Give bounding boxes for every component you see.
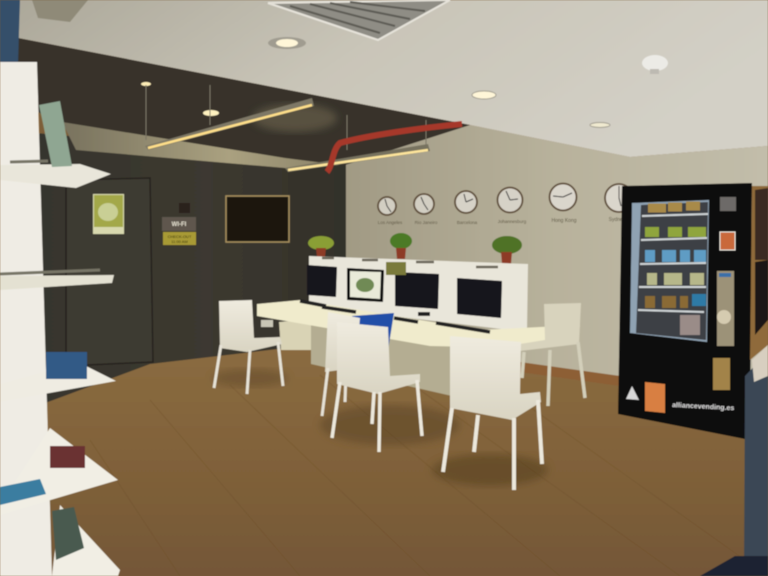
potted plants — [308, 233, 522, 264]
blue jacket on chair — [352, 313, 394, 382]
white chair back right — [520, 303, 585, 406]
wall clocks: Barcelona — [457, 220, 478, 225]
logo — [626, 386, 639, 400]
baseboard — [520, 362, 620, 386]
brand text: alliancevending.es — [672, 402, 735, 412]
wall TV — [226, 196, 289, 242]
white computer desk — [257, 256, 580, 396]
door — [66, 178, 153, 366]
wall outlet — [261, 320, 273, 327]
vending machine — [618, 183, 752, 440]
wall clocks: Hong Kong — [551, 218, 577, 224]
white chair front — [443, 336, 542, 490]
back wall — [345, 125, 768, 383]
white chair centre rear — [322, 312, 360, 416]
adjacent machine and person — [700, 186, 768, 576]
white ottoman — [279, 319, 312, 350]
wall clocks: Rio Janeiro — [415, 220, 438, 225]
white chair centre — [332, 322, 422, 452]
green poster — [93, 194, 124, 234]
ceiling bulkhead — [18, 38, 470, 168]
pendant light bars — [145, 85, 430, 172]
shelves — [0, 164, 111, 188]
wall clocks: Johannesburg — [498, 219, 527, 224]
control panel — [713, 197, 736, 390]
blue column corner — [0, 0, 20, 64]
ceiling — [18, 0, 768, 157]
dark wall — [0, 130, 346, 410]
wall clocks: Los Angeles — [378, 220, 403, 225]
wifi and check-out signs: CHECK-OUT — [168, 234, 192, 239]
wood floor — [0, 340, 768, 576]
shelves of snacks — [638, 206, 708, 325]
wifi and check-out signs: WI-FI — [172, 222, 187, 228]
white chair back left — [214, 300, 283, 394]
monitors — [307, 265, 502, 318]
wifi and check-out signs — [162, 203, 196, 245]
red pipe — [327, 124, 462, 172]
orange panel — [645, 382, 665, 413]
ceiling air vent — [268, 0, 450, 40]
wall clocks: Sydney — [609, 217, 626, 223]
wall clocks — [378, 184, 633, 225]
smoke detector — [642, 55, 668, 74]
ceiling lights — [32, 0, 610, 128]
wifi and check-out signs: 11:00 AM — [171, 239, 188, 244]
keyboards — [300, 301, 490, 332]
desk labels — [322, 258, 498, 267]
left white shelving — [0, 62, 120, 576]
green desk sign — [386, 262, 406, 275]
books and brochures — [39, 101, 72, 167]
